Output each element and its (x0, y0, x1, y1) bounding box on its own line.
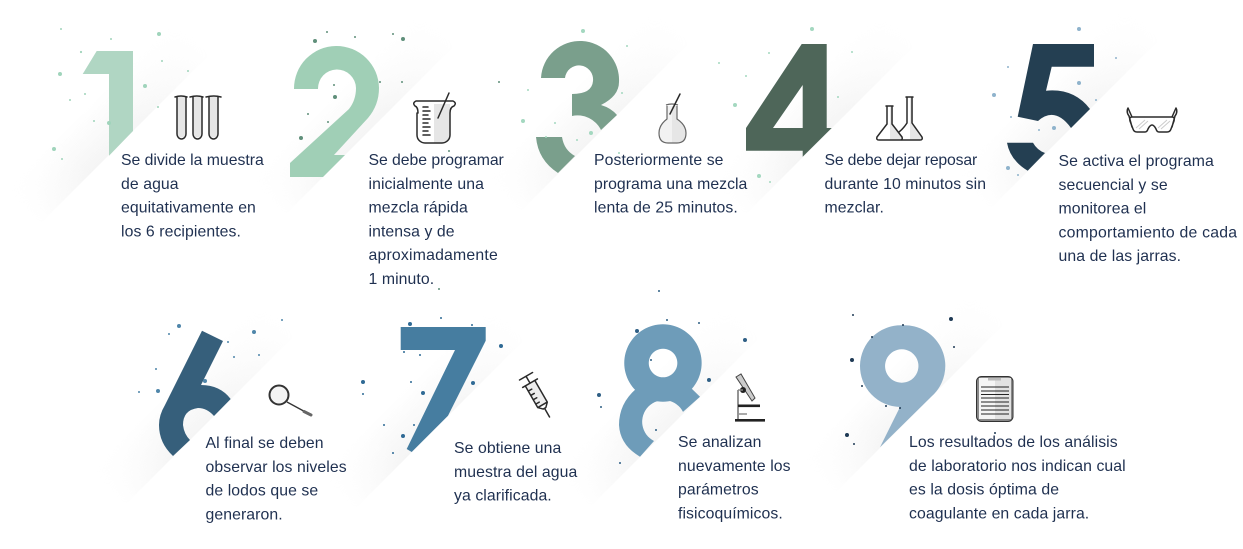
step 7 panel (361, 317, 577, 505)
text: lenta de 25 minutos. (594, 200, 738, 217)
step 3 panel (521, 29, 748, 217)
particles (597, 290, 747, 464)
number 2 (290, 46, 379, 177)
step 4 panel (746, 27, 986, 217)
text: Se divide la muestra (121, 152, 264, 169)
text: de agua (121, 176, 179, 193)
icon: goggles (1127, 108, 1177, 132)
text: Se analizan (678, 434, 761, 451)
text: Se obtiene una (454, 440, 562, 457)
text: Posteriormente se (594, 152, 724, 169)
text: durante 10 minutos sin (824, 176, 986, 193)
step 8 panel (597, 290, 791, 522)
text: aproximadamente (368, 247, 498, 264)
icon: microscope (735, 374, 765, 422)
icon: round flask (659, 94, 686, 143)
text: Se debe dejar reposar (824, 152, 977, 169)
icon: flasks (877, 97, 922, 140)
icon: test tubes (175, 96, 221, 139)
step 9 panel (845, 314, 1126, 522)
text: fisicoquímicos. (678, 505, 783, 522)
text: intensa y de (368, 223, 455, 240)
number 8 (619, 324, 702, 457)
particles (757, 27, 853, 183)
text: parámetros (678, 482, 759, 499)
text: inicialmente una (368, 176, 484, 193)
text: Se debe programar (368, 152, 504, 169)
number 1 (83, 51, 133, 156)
step 5 panel (992, 27, 1237, 265)
text: es la dosis óptima de (909, 482, 1059, 499)
text: muestra del agua (454, 464, 577, 481)
text: programa una mezcla (594, 176, 748, 193)
number 9 (860, 325, 945, 447)
text: monitorea el (1058, 201, 1146, 218)
text: observar los niveles (206, 459, 347, 476)
particles (361, 317, 503, 454)
number 3 (536, 41, 619, 173)
number 6 (159, 331, 231, 456)
particles (845, 314, 996, 445)
number 4 (746, 44, 832, 157)
text: nuevamente los (678, 458, 791, 475)
text: equitativamente en (121, 200, 256, 217)
number 5 (1007, 44, 1094, 171)
step 6 panel (138, 319, 347, 523)
text: secuencial y se (1058, 177, 1168, 194)
icon: clipboard (976, 376, 1013, 422)
text: Al final se deben (206, 435, 324, 452)
particles (299, 31, 500, 290)
particles (992, 27, 1117, 176)
text: ya clarificada. (454, 488, 552, 505)
particles (52, 28, 189, 160)
step 2 panel (290, 31, 504, 290)
icon: beaker (414, 93, 455, 143)
text: coagulante en cada jarra. (909, 505, 1089, 522)
text: 1 minuto. (368, 271, 434, 288)
text: los 6 recipientes. (121, 223, 241, 240)
text: Los resultados de los análisis (909, 434, 1118, 451)
number 7 (401, 327, 486, 452)
text: de lodos que se (206, 483, 318, 500)
step 1 panel (52, 28, 264, 240)
text: mezcla rápida (368, 200, 468, 217)
text: de laboratorio nos indican cual (909, 458, 1126, 475)
icon: syringe (519, 372, 557, 421)
particles (521, 29, 747, 154)
text: una de las jarras. (1058, 248, 1181, 265)
text: Se activa el programa (1058, 153, 1214, 170)
text: mezclar. (824, 200, 884, 217)
particles (138, 319, 283, 393)
text: generaron. (206, 506, 283, 523)
text: comportamiento de cada (1058, 224, 1237, 241)
icon: magnifier (270, 386, 311, 415)
